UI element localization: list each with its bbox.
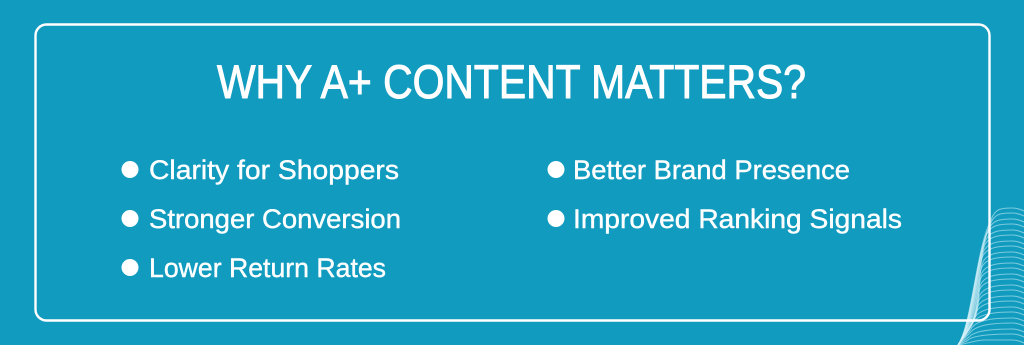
item: Better Brand Presence: Better Brand Presence <box>573 155 850 185</box>
title: WHY A+ CONTENT MATTERS? <box>217 55 806 108</box>
item: Clarity for Shoppers: Clarity for Shoppers <box>149 155 399 185</box>
decorative wave lines <box>958 208 1024 345</box>
item: Stronger Conversion: Stronger Conversion <box>149 204 401 234</box>
panel: rounded white frame <box>36 24 990 320</box>
list: right column <box>548 155 902 234</box>
item: Lower Return Rates: Lower Return Rates <box>149 253 386 283</box>
list: left column <box>122 155 401 283</box>
item: Improved Ranking Signals: Improved Ranking Signals <box>573 204 902 234</box>
